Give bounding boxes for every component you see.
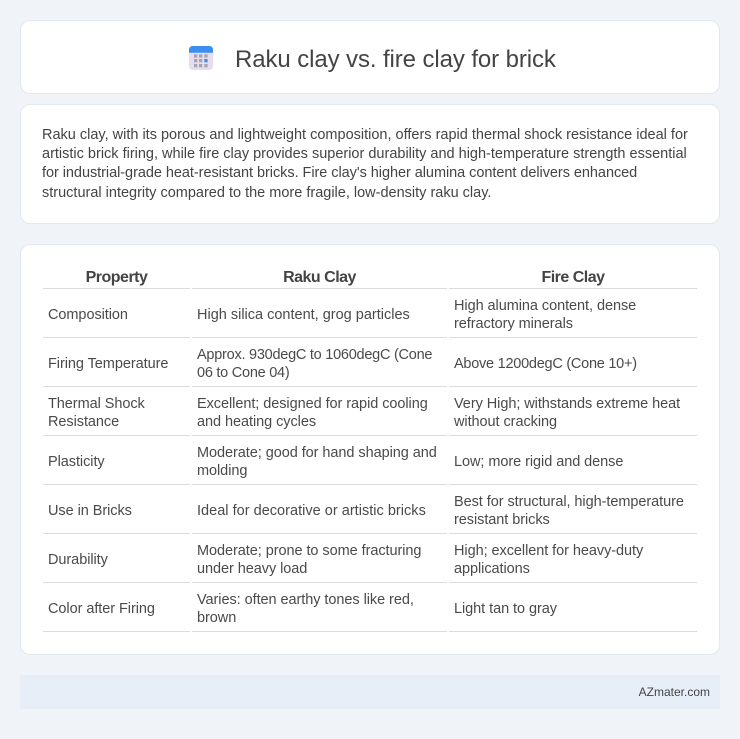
intro paragraph: structural integrity compared to the more fragile, low-density raku clay. bbox=[42, 185, 491, 201]
comparison table panel: molding bbox=[197, 463, 247, 479]
row: composition bbox=[43, 298, 697, 338]
comparison table panel: under heavy load bbox=[197, 561, 307, 577]
comparison table panel: Property bbox=[86, 269, 147, 286]
footer bar bbox=[20, 675, 720, 709]
comparison table panel: refractory minerals bbox=[454, 316, 573, 332]
row: use in bricks bbox=[43, 494, 697, 534]
comparison table panel: Moderate; good for hand shaping and bbox=[197, 445, 437, 461]
intro paragraph: for industrial-grade heat-resistant bricks. Fire clay's higher alumina content delivers enhanced bbox=[42, 165, 637, 181]
row: firing temperature bbox=[43, 347, 697, 387]
comparison table panel: Light tan to gray bbox=[454, 601, 557, 617]
footer credit: AZmater.com bbox=[639, 685, 710, 699]
comparison table panel: Color after Firing bbox=[48, 601, 155, 617]
comparison table panel: Thermal Shock bbox=[48, 396, 145, 412]
comparison table panel: High; excellent for heavy-duty bbox=[454, 543, 643, 559]
comparison table panel: Durability bbox=[48, 552, 108, 568]
comparison table panel: High alumina content, dense bbox=[454, 298, 636, 314]
comparison table panel: Resistance bbox=[48, 414, 119, 430]
intro paragraph: artistic brick firing, while fire clay provides superior durability and high-temperature strength essential bbox=[42, 146, 687, 162]
comparison table panel: Above 1200degC (Cone 10+) bbox=[454, 356, 637, 372]
comparison table panel: Composition bbox=[48, 307, 128, 323]
comparison table panel: Firing Temperature bbox=[48, 356, 168, 372]
header panel bbox=[20, 20, 720, 94]
comparison table panel: and heating cycles bbox=[197, 414, 316, 430]
title: Raku clay vs. fire clay for brick bbox=[235, 46, 556, 73]
comparison table panel bbox=[20, 244, 720, 655]
comparison table panel: 06 to Cone 04) bbox=[197, 365, 289, 381]
comparison table panel: Ideal for decorative or artistic bricks bbox=[197, 503, 426, 519]
comparison table panel: without cracking bbox=[454, 414, 557, 430]
table header row bbox=[43, 269, 697, 289]
comparison table panel: High silica content, grog particles bbox=[197, 307, 410, 323]
comparison table panel: Plasticity bbox=[48, 454, 105, 470]
comparison table panel: brown bbox=[197, 610, 236, 626]
row: thermal shock resistance bbox=[43, 396, 697, 436]
intro paragraph bbox=[42, 127, 688, 201]
comparison table panel: Approx. 930degC to 1060degC (Cone bbox=[197, 347, 432, 363]
intro text panel bbox=[20, 104, 720, 224]
row: durability bbox=[43, 543, 697, 583]
row: plasticity bbox=[43, 445, 697, 485]
comparison table panel: resistant bricks bbox=[454, 512, 550, 528]
row: color after firing bbox=[43, 592, 697, 632]
comparison table panel: Excellent; designed for rapid cooling bbox=[197, 396, 428, 412]
intro paragraph: Raku clay, with its porous and lightweight composition, offers rapid thermal shock resistance ideal for bbox=[42, 127, 688, 143]
comparison table panel: Use in Bricks bbox=[48, 503, 132, 519]
comparison table panel: Varies: often earthy tones like red, bbox=[197, 592, 414, 608]
comparison table panel: Raku Clay bbox=[283, 269, 356, 286]
comparison table panel: Best for structural, high-temperature bbox=[454, 494, 684, 510]
comparison table panel: Low; more rigid and dense bbox=[454, 454, 623, 470]
comparison table panel: Fire Clay bbox=[541, 269, 605, 286]
comparison table panel: Very High; withstands extreme heat bbox=[454, 396, 680, 412]
comparison table panel: applications bbox=[454, 561, 530, 577]
icon: calendar bbox=[189, 46, 213, 70]
comparison table panel: Moderate; prone to some fracturing bbox=[197, 543, 421, 559]
